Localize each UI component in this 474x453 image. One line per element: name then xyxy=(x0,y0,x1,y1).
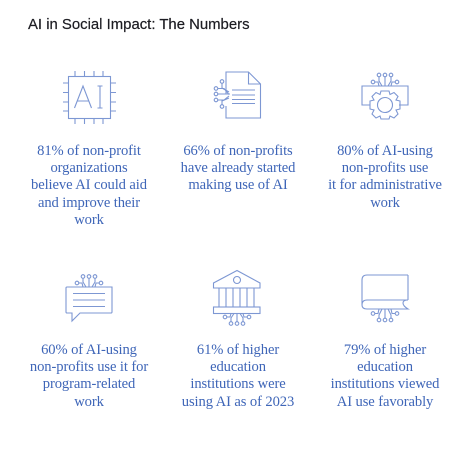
stat: 79%: 79% of higher xyxy=(344,342,426,358)
stat: 81% xyxy=(31,143,147,228)
stat: 66%: making use of AI xyxy=(188,177,288,193)
stat: 60% xyxy=(30,342,148,410)
stat: 81%: work xyxy=(74,212,104,228)
title: AI in Social Impact: The Numbers xyxy=(28,17,250,33)
stat: 81%: organizations xyxy=(50,160,128,176)
stat: 79%: institutions viewed xyxy=(331,376,439,392)
stat: 79% xyxy=(330,342,440,410)
stat: 66%: have already started xyxy=(181,160,295,176)
stat: 81%: believe AI could aid xyxy=(31,177,147,193)
icon: AI chip xyxy=(63,71,116,124)
icon: gear xyxy=(362,73,408,119)
stat: 80%: 80% of AI-using xyxy=(337,143,433,159)
stat: 60%: program-related xyxy=(43,376,135,392)
stat: 80%: it for administrative xyxy=(328,177,442,193)
stat: 81%: and improve their xyxy=(38,195,140,211)
icon: bank building xyxy=(214,270,260,325)
stat: 61%: using AI as of 2023 xyxy=(182,394,294,410)
stat: 61%: 61% of higher xyxy=(197,342,279,358)
stat: 80%: work xyxy=(370,195,400,211)
stat: 66%: 66% of non-profits xyxy=(183,143,293,159)
stat: 66% xyxy=(180,143,296,193)
stat: 79%: education xyxy=(357,359,413,375)
icon: document xyxy=(214,72,260,118)
stat: 60%: 60% of AI-using xyxy=(41,342,137,358)
stat: 80%: non-profits use xyxy=(342,160,428,176)
stat: 60%: non-profits use it for xyxy=(30,359,148,375)
stat: 61% xyxy=(182,342,294,410)
icon: book xyxy=(362,275,408,322)
stat: 61%: institutions were xyxy=(190,376,286,392)
stat: 60%: work xyxy=(74,394,104,410)
stat: 61%: education xyxy=(210,359,266,375)
icon: speech bubble xyxy=(66,275,112,321)
stat: 81%: 81% of non-profit xyxy=(37,143,141,159)
stat: 79%: AI use favorably xyxy=(337,394,433,410)
stat: 80% xyxy=(328,143,442,211)
